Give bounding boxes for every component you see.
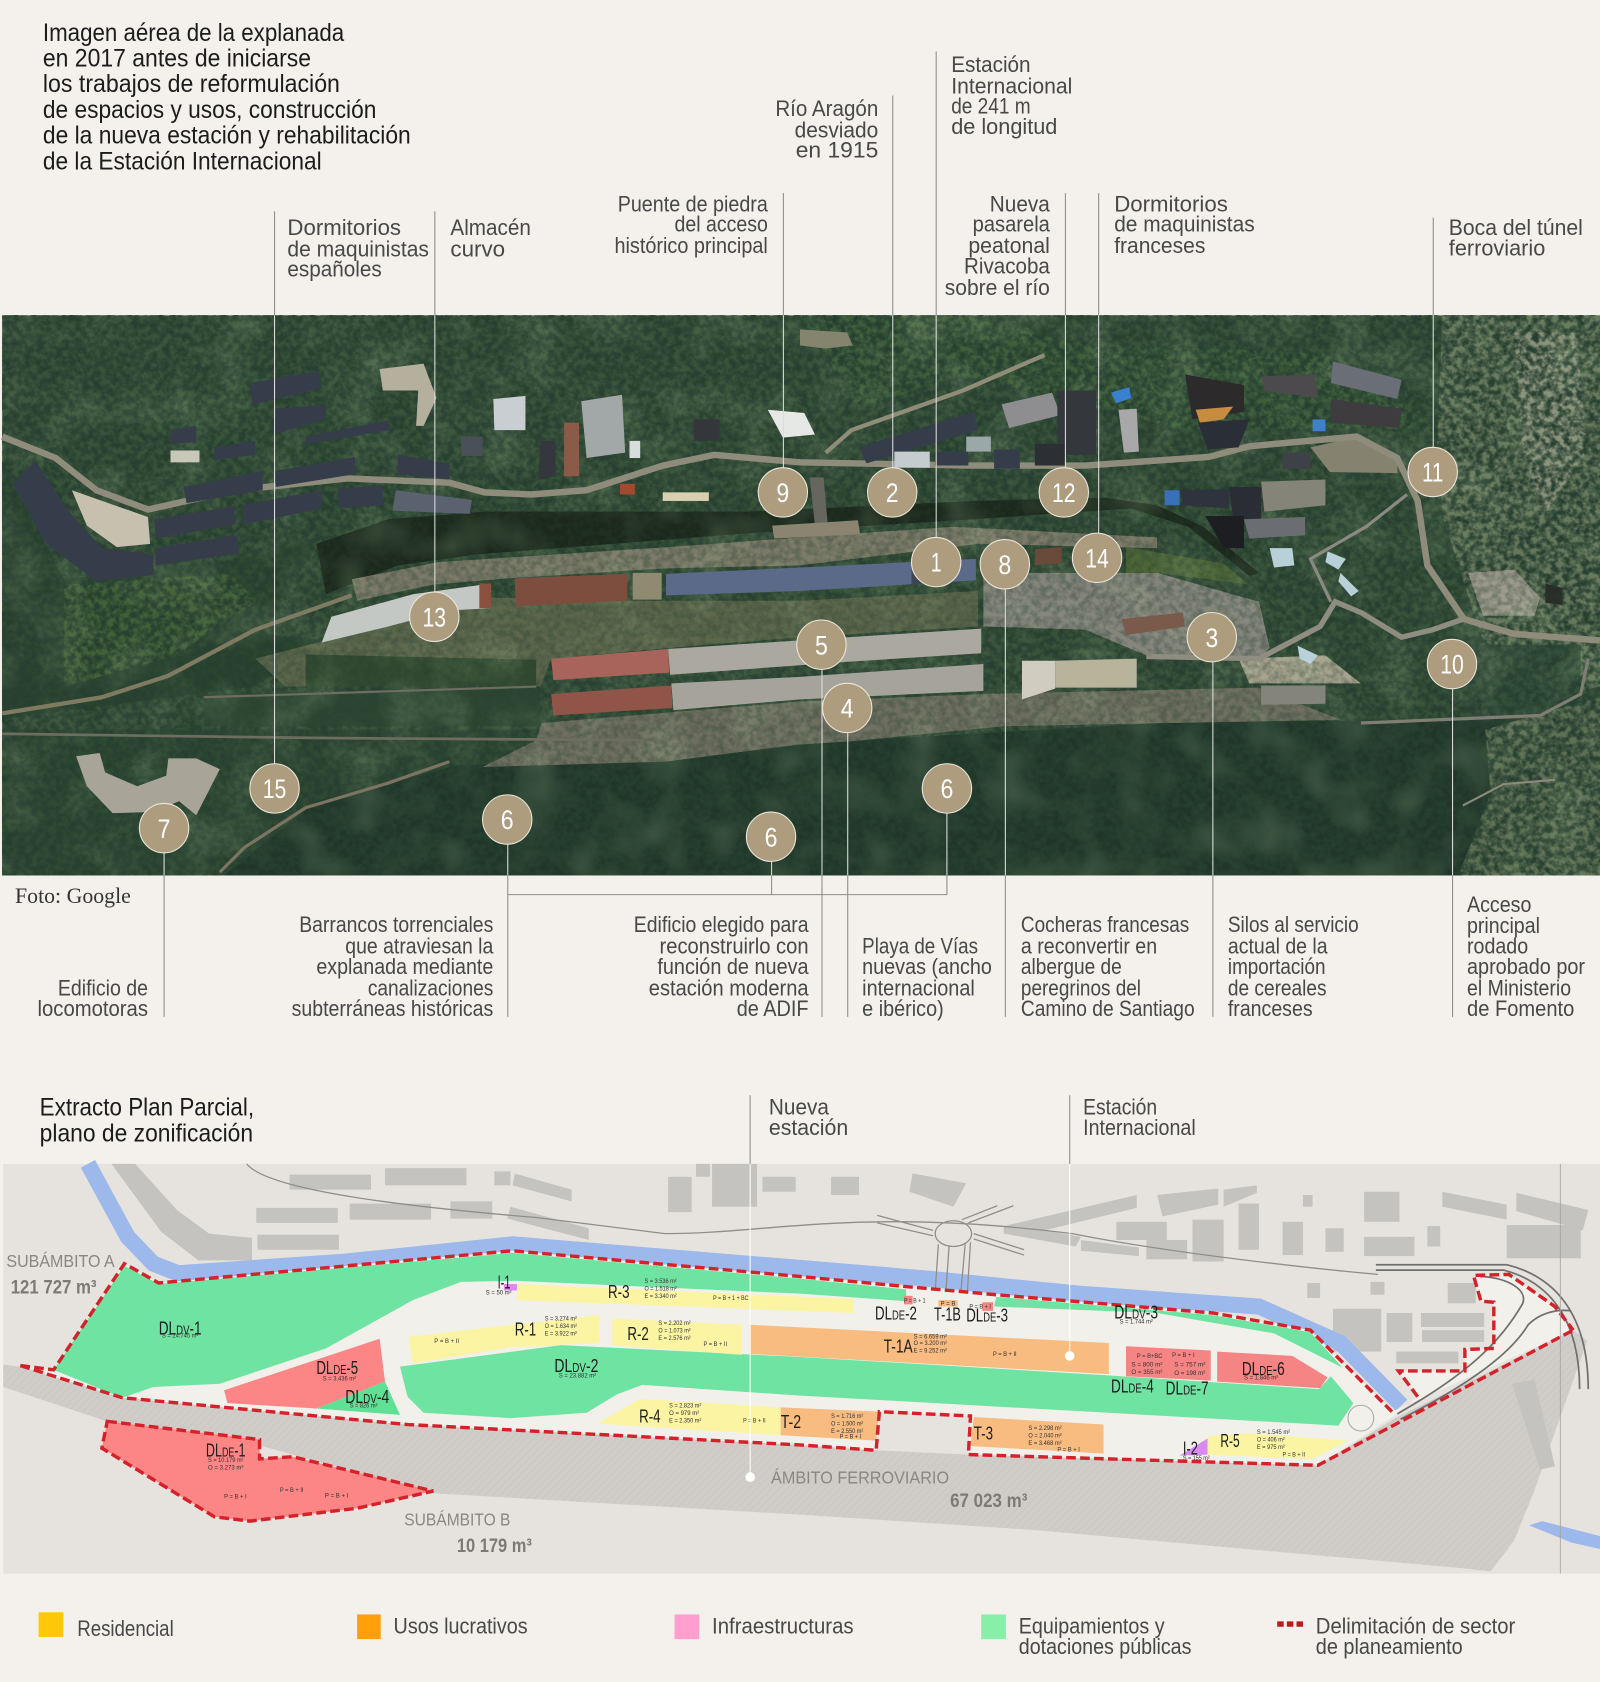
- plan leader: estación internacional: [1065, 1095, 1075, 1361]
- light mottling: [2, 315, 1600, 875]
- zone labels: S = 50 m²: [486, 1291, 512, 1297]
- label: playa de vías: Playa de Vías: [862, 934, 978, 959]
- zone labels: T-2: [781, 1411, 801, 1432]
- zone labels: R-4: [639, 1405, 661, 1426]
- label: nueva pasarela: [945, 191, 1050, 300]
- zone labels: S = 3.536 m²: [645, 1279, 677, 1285]
- roads: [2, 437, 1600, 640]
- area labels: SUBÁMBITO A: [6, 1251, 115, 1271]
- label: edificio elegido: estación moderna: [649, 975, 809, 1000]
- numbered markers: 12: [1052, 478, 1076, 508]
- zone labels: T-1B: [934, 1303, 961, 1324]
- heading: plan parcial: Extracto Plan Parcial,: [40, 1095, 254, 1122]
- zone labels: S = 826 m²: [350, 1403, 377, 1409]
- zone labels: E = 975 m²: [1257, 1445, 1285, 1451]
- zone labels: S = 6.659 m²: [914, 1335, 947, 1341]
- label: estación internacional plan: Estación: [1083, 1095, 1157, 1120]
- label: silos: [1228, 912, 1359, 1021]
- zone labels: O = 406 m²: [1257, 1438, 1285, 1444]
- zone labels: DLDE-5: [316, 1357, 358, 1378]
- label: boca del túnel: ferroviario: [1449, 235, 1545, 260]
- label: dormitorios españoles: españoles: [287, 257, 382, 282]
- zone labels: DLDE-6: [1242, 1358, 1285, 1379]
- leader lines aerial: [164, 51, 1453, 1017]
- zone labels: R-3: [608, 1281, 629, 1302]
- label: puente de piedra: [614, 191, 768, 258]
- legend: usos lucrativos: Usos lucrativos: [394, 1614, 528, 1639]
- legend: usos lucrativos: [357, 1614, 528, 1639]
- label: barrancos torrenciales: [292, 912, 494, 1021]
- numbered markers: [139, 447, 1477, 861]
- zone labels: O = 1.500 m²: [831, 1422, 863, 1428]
- label: cocheras francesas: a reconvertir en: [1021, 934, 1157, 959]
- zone labels: DLDE-3: [966, 1305, 1008, 1326]
- zone labels: DLDE-4: [1111, 1375, 1154, 1396]
- legend: [39, 1612, 1516, 1659]
- numbered markers: 4: [841, 694, 854, 724]
- legend: residencial: Residencial: [77, 1616, 174, 1641]
- label: playa de vías: nuevas (ancho: [862, 954, 992, 979]
- numbered markers: 6: [501, 805, 514, 835]
- zone labels: S = 10.179 m²: [208, 1458, 243, 1464]
- label: silos: actual de la: [1228, 934, 1328, 959]
- label: nueva pasarela: Rivacoba: [964, 254, 1050, 279]
- title: aerial image: en 2017 antes de iniciarse: [43, 46, 311, 73]
- zone labels: DLDV-1: [159, 1317, 202, 1338]
- zone labels: P = B + I: [840, 1434, 861, 1440]
- label: cocheras francesas: peregrinos del: [1021, 975, 1141, 1000]
- yellow zones: [409, 1284, 1348, 1459]
- area labels: SUBÁMBITO B: [404, 1509, 510, 1529]
- gorge and tree shadow: [316, 498, 1259, 594]
- label: dormitorios franceses: Dormitorios: [1114, 191, 1228, 216]
- label: almacén curvo: curvo: [450, 236, 505, 261]
- label: acceso principal: principal: [1467, 913, 1540, 938]
- zone labels: P = B + I: [1172, 1353, 1195, 1359]
- tree bands: [204, 689, 540, 726]
- title: aerial image: de la Estación Internacional: [43, 148, 322, 175]
- label: playa de vías: e ibérico): [862, 996, 944, 1021]
- zone labels: O = 1.073 m²: [658, 1328, 691, 1334]
- orange zones: [750, 1300, 1109, 1454]
- zone labels: S = 1.545 m²: [1257, 1430, 1290, 1436]
- label: estación internacional: de longitud: [951, 114, 1057, 139]
- label: almacén curvo: [450, 215, 531, 261]
- label: barrancos torrenciales: canalizaciones: [368, 975, 493, 1000]
- label: dormitorios españoles: Dormitorios: [287, 215, 401, 240]
- purple zones: [1180, 1438, 1208, 1456]
- label: boca del túnel: Boca del túnel: [1449, 215, 1583, 240]
- zone labels: I-1: [498, 1271, 510, 1292]
- zone labels: P = B + II: [1283, 1453, 1305, 1459]
- title: aerial image: [43, 20, 411, 175]
- label: barrancos torrenciales: subterráneas históricas: [292, 996, 493, 1021]
- zone labels: E = 3.922 m²: [545, 1332, 577, 1338]
- area labels: ÁMBITO FERROVIARIO: [771, 1468, 949, 1488]
- legend: infraestructuras: Infraestructuras: [712, 1614, 854, 1639]
- label: nueva estación: [769, 1095, 848, 1140]
- label: barrancos torrenciales: que atraviesan la: [345, 934, 494, 959]
- zone labels: E = 2.550 m²: [831, 1429, 863, 1435]
- zone labels: S = 3.274 m²: [545, 1316, 577, 1322]
- zone labels: S = 1.744 m²: [1120, 1320, 1153, 1326]
- zone labels: O = 979 m²: [669, 1411, 699, 1417]
- numbered markers: 6: [940, 774, 953, 804]
- zone labels: DLDE-7: [1166, 1378, 1209, 1399]
- numbered markers: 3: [1205, 623, 1218, 653]
- bridge and old access: [810, 477, 828, 526]
- label: dormitorios franceses: de maquinistas: [1114, 212, 1255, 237]
- label: dormitorios franceses: [1114, 191, 1255, 258]
- zone labels: R-2: [627, 1323, 649, 1344]
- label: silos: franceses: [1228, 996, 1313, 1021]
- label: puente de piedra: histórico principal: [614, 233, 768, 258]
- numbered markers: 10: [1440, 650, 1464, 680]
- zone labels: E = 2.576 m²: [658, 1336, 691, 1342]
- zone labels: P = B + II: [434, 1339, 459, 1345]
- surrounding buildings: [112, 1164, 1588, 1470]
- photo credit: Foto: Google: [15, 883, 131, 908]
- label: barrancos torrenciales: Barrancos torrenciales: [299, 912, 493, 937]
- zone labels: P = B + II: [993, 1352, 1017, 1358]
- label: nueva pasarela: Nueva: [990, 191, 1050, 216]
- upper road and roundabout: [247, 1164, 1378, 1293]
- label: puente de piedra: Puente de piedra: [618, 191, 768, 216]
- zone labels: O = 1.634 m²: [545, 1324, 577, 1330]
- label: estación internacional: Internacional: [951, 73, 1072, 98]
- label: estación internacional: Estación: [951, 52, 1031, 77]
- label: nueva estación: estación: [769, 1115, 848, 1140]
- area labels: [6, 1251, 1028, 1557]
- ground: upper gravel: [352, 527, 1157, 601]
- railway tracks: [1376, 1265, 1588, 1419]
- heading: plan parcial: plano de zonificación: [40, 1120, 253, 1147]
- numbered markers: 14: [1085, 543, 1109, 573]
- soft texture on ground: [2, 315, 1600, 875]
- label: cocheras francesas: albergue de: [1021, 954, 1122, 979]
- zone labels: E = 9.252 m²: [914, 1349, 947, 1355]
- numbered markers: 8: [998, 550, 1011, 580]
- zone labels: DLDE-2: [875, 1302, 917, 1323]
- label: dormitorios franceses: franceses: [1114, 233, 1205, 258]
- label: silos: de cereales: [1228, 975, 1327, 1000]
- legend: equipamientos: Equipamientos y: [1019, 1614, 1165, 1639]
- zone labels: E = 3.468 m²: [1028, 1441, 1062, 1447]
- silos area: [1022, 661, 1055, 699]
- zone labels: S = 1.716 m²: [831, 1414, 863, 1420]
- ground: grass patch: [1126, 547, 1249, 585]
- zone labels: P = B + 1 + BC: [713, 1296, 749, 1302]
- label: cocheras francesas: Camino de Santiago: [1021, 996, 1195, 1021]
- zone labels: E = 2.350 m²: [669, 1418, 701, 1424]
- label: río Aragón: Río Aragón: [775, 96, 878, 121]
- area labels: 10 179 m³: [457, 1536, 532, 1557]
- legend: delimitación: de planeamiento: [1316, 1634, 1463, 1659]
- zone labels: P = B + II: [703, 1342, 727, 1348]
- numbered markers: 5: [815, 630, 828, 660]
- area labels: 121 727 m³: [11, 1278, 97, 1299]
- label: acceso principal: aprobado por: [1467, 954, 1585, 979]
- label: cocheras francesas: [1021, 912, 1195, 1021]
- residential buildings: [13, 371, 1020, 581]
- locomotive building: [76, 753, 220, 815]
- zone labels: S = 1.846 m²: [1244, 1375, 1278, 1381]
- label: edificio de locomotoras: Edificio de: [58, 975, 148, 1000]
- label: estación internacional plan: Internacional: [1083, 1115, 1196, 1140]
- zone labels: S = 800 m²: [1131, 1363, 1162, 1369]
- zone labels: S = 2.823 m²: [669, 1403, 701, 1409]
- numbered markers: 2: [886, 478, 899, 508]
- label: edificio de locomotoras: locomotoras: [38, 996, 148, 1021]
- zone labels: R-5: [1220, 1430, 1240, 1451]
- label: edificio elegido: [634, 912, 809, 1021]
- sector base: [20, 1251, 1573, 1465]
- ground: rubble: [1239, 655, 1361, 683]
- ground: lower gravel: [483, 688, 1340, 767]
- zone labels: P = B + II: [743, 1418, 766, 1424]
- label: acceso principal: [1467, 892, 1585, 1021]
- heading: plan parcial: [40, 1095, 254, 1147]
- station and yard buildings: [666, 559, 976, 595]
- zone labels: P = B + I: [325, 1493, 349, 1499]
- zone labels: S = 3.436 m²: [323, 1377, 356, 1383]
- label: nueva pasarela: pasarela: [973, 212, 1050, 237]
- label: cocheras francesas: Cocheras francesas: [1021, 912, 1189, 937]
- label: edificio elegido: función de nueva: [657, 954, 809, 979]
- label: dormitorios españoles: [287, 215, 429, 282]
- label: playa de vías: internacional: [862, 975, 975, 1000]
- label: boca del túnel: [1449, 215, 1583, 260]
- zone labels: O = 1.518 m²: [645, 1286, 677, 1292]
- label: dormitorios españoles: de maquinistas: [287, 236, 429, 261]
- forest tone areas: [2, 315, 1600, 875]
- label: acceso principal: rodado: [1467, 934, 1528, 959]
- label: acceso principal: Acceso: [1467, 892, 1531, 917]
- label: estación internacional: [951, 52, 1072, 139]
- sector boundary dashed: [20, 1251, 1573, 1521]
- zone labels: P = B + I: [1057, 1447, 1080, 1453]
- label: barrancos torrenciales: explanada mediante: [316, 954, 493, 979]
- zone labels: T-3: [974, 1423, 993, 1444]
- ground: clear zone: [983, 573, 1270, 659]
- plazas: [72, 490, 150, 547]
- label: silos: Silos al servicio: [1228, 912, 1359, 937]
- ground: yard: [255, 591, 978, 687]
- label: nueva pasarela: sobre el río: [945, 275, 1050, 300]
- zone labels: O = 3.273 m²: [208, 1466, 243, 1472]
- zone labels: I-2: [1183, 1438, 1198, 1459]
- zone labels: O = 355 m²: [1131, 1370, 1162, 1376]
- title: aerial image: los trabajos de reformulación: [43, 71, 340, 98]
- zone labels: P = B + 1: [904, 1298, 926, 1304]
- zone labels: [159, 1271, 1305, 1501]
- zone labels: O = 2.040 m²: [1028, 1433, 1062, 1439]
- plan leader: nueva estación: [745, 1095, 755, 1482]
- railway area: [3, 1330, 1587, 1572]
- label: edificio elegido: Edificio elegido para: [634, 912, 809, 937]
- zone labels: DLDV-4: [345, 1386, 389, 1407]
- label: río Aragón: en 1915: [796, 138, 878, 163]
- label: edificio de locomotoras: [38, 975, 148, 1021]
- label: estación internacional: de 241 m: [951, 94, 1031, 119]
- label: estación internacional plan: [1083, 1095, 1196, 1140]
- rock pile: [1468, 570, 1540, 616]
- zone labels: S = 24.745 m²: [162, 1334, 198, 1340]
- label: nueva estación: Nueva: [769, 1095, 829, 1120]
- numbered markers: 9: [776, 478, 789, 508]
- centre buildings: [493, 396, 525, 430]
- label: acceso principal: el Ministerio: [1467, 975, 1571, 1000]
- title: aerial image: de espacios y usos, construcción: [43, 97, 376, 124]
- zone labels: E = 3.340 m²: [645, 1294, 677, 1300]
- zone labels: P = B + I: [969, 1305, 991, 1311]
- curved warehouse: [322, 585, 490, 643]
- numbered markers: 1: [931, 548, 942, 578]
- label: nueva pasarela: peatonal: [968, 233, 1050, 258]
- legend: equipamientos: [981, 1614, 1191, 1659]
- zone labels: P = B+BC: [1137, 1354, 1163, 1360]
- label: río Aragón: [775, 96, 878, 163]
- legend: equipamientos: dotaciones públicas: [1019, 1634, 1191, 1659]
- aerial photo: [2, 315, 1600, 875]
- zone labels: O = 3.200 m²: [914, 1341, 947, 1347]
- legend: delimitación: Delimitación de sector: [1316, 1614, 1516, 1639]
- title: aerial image: de la nueva estación y rehabilitación: [43, 123, 411, 150]
- numbered markers: 15: [263, 774, 286, 804]
- zone labels: P = B: [940, 1301, 955, 1307]
- zone labels: S = 23.882 m²: [559, 1373, 596, 1379]
- label: silos: importación: [1228, 954, 1325, 979]
- label: acceso principal: de Fomento: [1467, 996, 1574, 1021]
- label: puente de piedra: del acceso: [675, 212, 768, 237]
- zone labels: T-1A: [884, 1336, 913, 1357]
- label: río Aragón: desviado: [795, 117, 878, 142]
- zone labels: S = 2.298 m²: [1028, 1426, 1062, 1432]
- label: playa de vías: [862, 934, 992, 1021]
- zone labels: DLDV-3: [1114, 1301, 1158, 1322]
- zone labels: DLDV-2: [554, 1355, 598, 1376]
- zone labels: S = 155 m²: [1183, 1456, 1210, 1462]
- zone labels: DLDE-1: [206, 1440, 246, 1461]
- zoning plan map: [3, 1164, 1600, 1574]
- label: edificio elegido: de ADIF: [737, 996, 809, 1021]
- numbered markers: 11: [1422, 458, 1443, 488]
- zone labels: O = 198 m²: [1174, 1371, 1205, 1377]
- zone labels: P = B + II: [280, 1488, 304, 1494]
- river: [88, 1164, 1402, 1405]
- tree texture: [2, 315, 1600, 875]
- zone labels: S = 2.202 m²: [658, 1321, 691, 1327]
- green zones: [54, 1253, 906, 1398]
- red zones: [224, 1339, 385, 1408]
- numbered markers: 7: [158, 814, 171, 844]
- legend: delimitación: [1277, 1614, 1516, 1659]
- zone labels: P = B + I: [224, 1495, 247, 1501]
- zone labels: S = 757 m²: [1174, 1363, 1205, 1369]
- label: edificio elegido: reconstruirlo con: [660, 934, 809, 959]
- numbered markers: 13: [423, 602, 446, 632]
- area labels: 67 023 m³: [950, 1491, 1028, 1512]
- zone labels: R-1: [515, 1319, 536, 1340]
- label: almacén curvo: Almacén: [450, 215, 531, 240]
- numbered markers: 6: [765, 822, 777, 852]
- title: aerial image: Imagen aérea de la explanada: [43, 20, 344, 47]
- legend: residencial: [39, 1612, 174, 1641]
